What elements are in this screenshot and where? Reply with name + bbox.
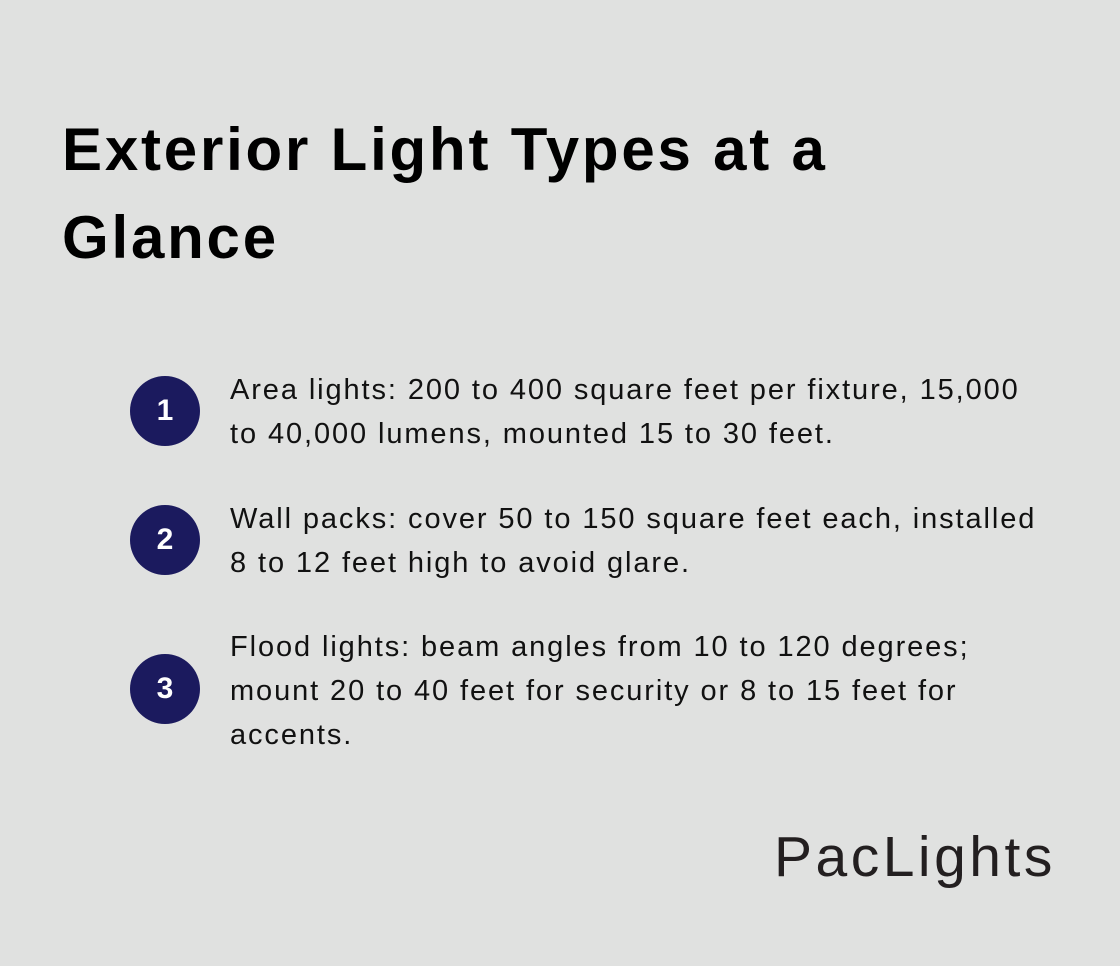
text 3 (230, 631, 970, 751)
item 2 (130, 503, 1036, 579)
logo: PacLights (774, 825, 1056, 889)
text 2: 8 to 12 feet high to avoid glare. (230, 547, 691, 579)
title: Glance (62, 204, 279, 271)
text 1 (230, 374, 1020, 450)
number badge 3: 3 (157, 672, 173, 705)
item 1 (130, 374, 1020, 450)
number badge 2 (130, 505, 200, 575)
text 3: mount 20 to 40 feet for security or 8 to 15 feet for (230, 675, 957, 707)
text 2 (230, 503, 1036, 579)
number badge 2: 2 (157, 523, 173, 556)
item 3 (130, 631, 970, 751)
text 3: Flood lights: beam angles from 10 to 120 degrees; (230, 631, 970, 663)
number badge 1 (130, 376, 200, 446)
number badge 1: 1 (157, 394, 173, 427)
text 2: Wall packs: cover 50 to 150 square feet each, installed (230, 503, 1036, 535)
text 3: accents. (230, 719, 353, 751)
text 1: to 40,000 lumens, mounted 15 to 30 feet. (230, 418, 835, 450)
title (62, 116, 828, 271)
title: Exterior Light Types at a (62, 116, 828, 183)
number badge 3 (130, 654, 200, 724)
text 1: Area lights: 200 to 400 square feet per fixture, 15,000 (230, 374, 1020, 406)
